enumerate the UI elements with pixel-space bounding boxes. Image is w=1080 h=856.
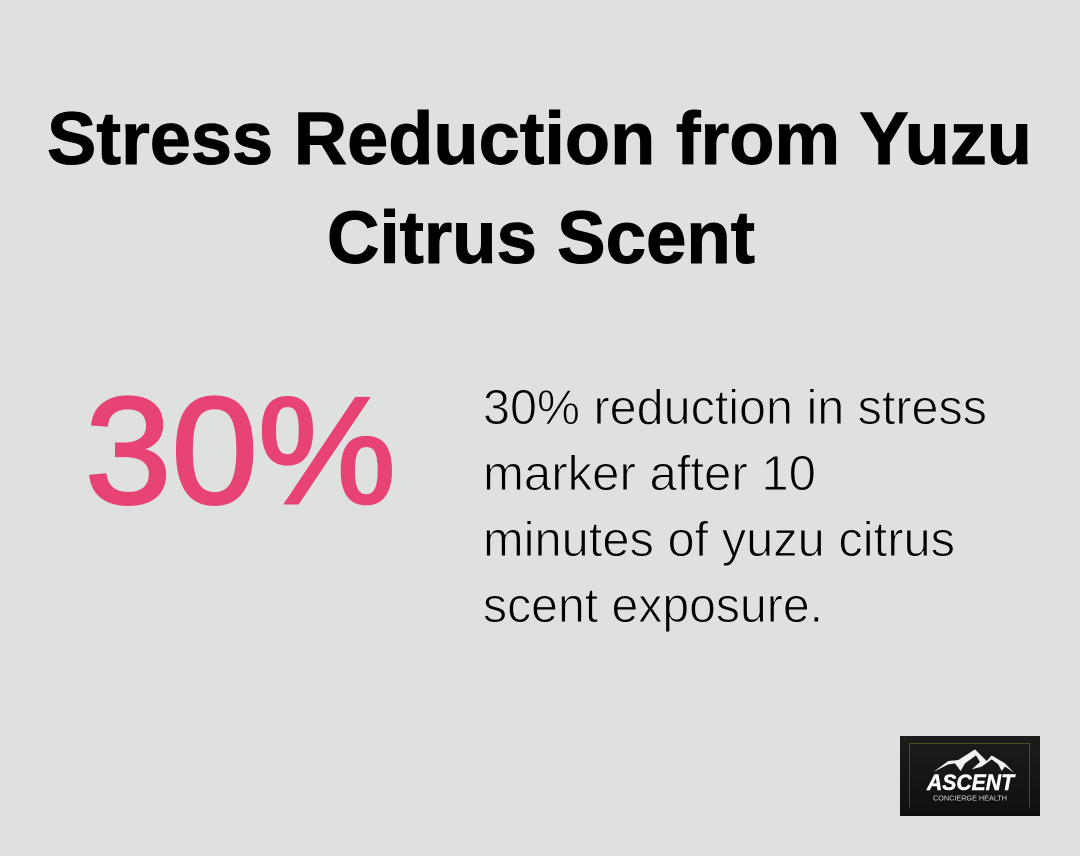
title: Citrus Scent — [327, 196, 755, 279]
title — [47, 97, 1032, 279]
logo: Ascent Concierge Health — [900, 736, 1040, 816]
description text — [483, 381, 987, 633]
icon: mountains — [933, 749, 1014, 773]
description text: minutes of yuzu citrus — [483, 513, 955, 567]
logo wordmark: ASCENT — [926, 770, 1015, 795]
title: Stress Reduction from Yuzu — [47, 97, 1032, 180]
description text: marker after 10 — [483, 447, 816, 501]
big statistic: 30%: 30% — [85, 366, 396, 536]
description text: 30% reduction in stress — [483, 381, 987, 435]
logo tagline: CONCIERGE HEALTH — [933, 794, 1007, 802]
description text: scent exposure. — [483, 579, 823, 633]
